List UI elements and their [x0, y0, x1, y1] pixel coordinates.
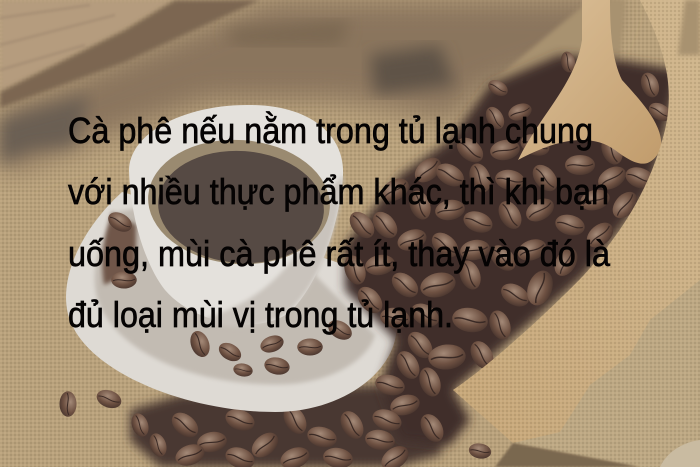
- wooden board top left: [0, 0, 260, 108]
- burlap sack: [453, 0, 700, 467]
- beans on the saucer: [105, 208, 355, 378]
- saucer: [66, 192, 397, 412]
- burlap lip behind beans: [470, 0, 625, 110]
- main text: Cà phê nếu nằm trong tủ lạnh chung: [68, 110, 593, 151]
- coffee cup: [129, 105, 343, 327]
- coffee bean pile: [340, 50, 680, 446]
- coffee surface: [144, 134, 334, 270]
- beans below the saucer: [60, 385, 492, 467]
- shadowed burlap area upper: [0, 0, 620, 175]
- main text: [68, 110, 611, 335]
- main text: với nhiều thực phẩm khác, thì khi bạn: [68, 171, 609, 212]
- main text: uống, mùi cà phê rất ít, thay vào đó là: [68, 233, 611, 274]
- main text: đủ loại mùi vị trong tủ lạnh.: [68, 294, 453, 335]
- wooden spoon: [518, 0, 661, 164]
